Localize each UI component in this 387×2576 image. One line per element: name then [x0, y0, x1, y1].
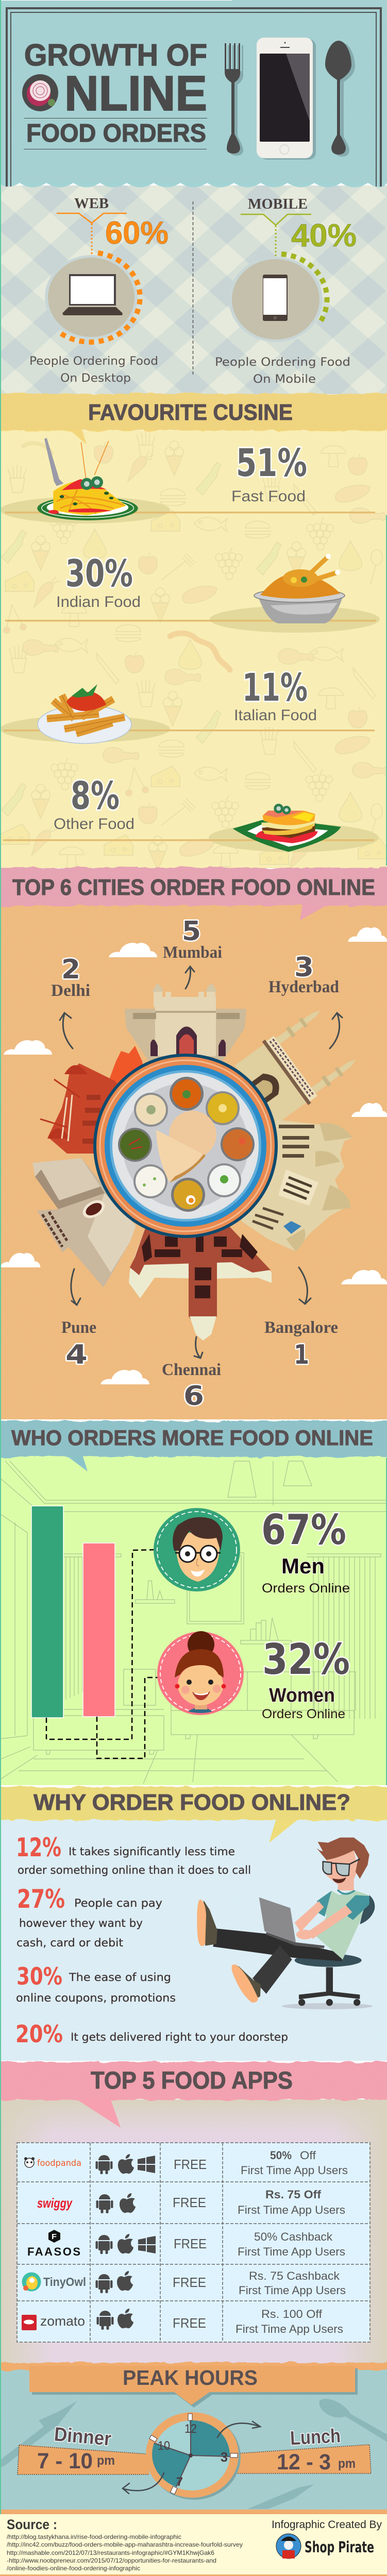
city: Delhi: 2	[61, 954, 80, 985]
row: foodpanda: 50%	[270, 2149, 292, 2162]
illustration: Bangalore palace	[241, 1120, 352, 1251]
text: web caption	[29, 355, 158, 385]
bowl: yellow curry	[206, 1091, 240, 1125]
reason: 27 percent: People can pay	[74, 1897, 162, 1909]
stat: italian food: Italian Food	[234, 707, 317, 724]
reason: 12 percent: 12%	[16, 1833, 61, 1862]
icon: phone	[257, 38, 316, 160]
illustration: Hyderabad charminar	[233, 1003, 361, 1126]
panel: top 5 apps band	[0, 2062, 387, 2128]
stat: italian food	[234, 666, 317, 724]
reason: 12 percent: order something online than it does to call	[18, 1864, 251, 1876]
icon: clock: 3	[221, 2449, 228, 2465]
row: zomato: FREE	[173, 2315, 206, 2331]
shelf shadows and lines	[0, 497, 380, 852]
arrows: meal times	[123, 2421, 260, 2494]
reason: 12 percent	[16, 1833, 251, 1876]
reason: 12 percent: It takes significantly less time	[69, 1845, 235, 1858]
connector: web	[57, 213, 127, 258]
row: faasos: First Time App Users	[238, 2245, 345, 2258]
reason: 30 percent: The ease of using	[69, 1971, 171, 1984]
illustration: Delhi red fort	[40, 1046, 144, 1154]
icon: spoon	[325, 41, 355, 157]
illustration: room line art	[0, 1461, 387, 1784]
heading: mobile: MOBILE	[248, 196, 308, 212]
illustration: Mumbai gateway	[125, 984, 246, 1062]
row: swiggy	[37, 2188, 345, 2216]
banner: peak hours: PEAK HOURS	[123, 2366, 258, 2389]
row: zomato	[22, 2308, 343, 2335]
panel: top 6 cities band	[0, 868, 387, 920]
row: foodpanda: Off	[300, 2149, 316, 2162]
row: tinyowl: First Time App Users	[239, 2284, 346, 2297]
row: faasos: FREE	[174, 2236, 207, 2251]
icon: penne pasta	[38, 684, 131, 743]
city: Mumbai	[163, 916, 222, 962]
reason: 27 percent: 27%	[17, 1884, 65, 1914]
stat: fast food: Fast Food	[231, 488, 306, 505]
text: sources: Source :	[7, 2517, 57, 2532]
heading: why order: WHY ORDER FOOD ONLINE?	[33, 1790, 350, 1815]
icon: man avatar	[154, 1508, 240, 1591]
icon: smartphone	[229, 254, 327, 342]
title: O	[22, 66, 59, 121]
stat: men	[261, 1506, 350, 1596]
label: dinner: Dinner	[53, 2424, 112, 2450]
row: swiggy: swiggy	[37, 2195, 73, 2211]
stat: other food	[54, 774, 134, 833]
text: mobile caption: People Ordering Food	[215, 356, 350, 369]
icon: shop pirate logo	[276, 2534, 301, 2558]
text: mobile caption: On Mobile	[253, 373, 316, 386]
reason: 27 percent	[16, 1884, 162, 1949]
illustration: thali plate	[93, 1054, 278, 1238]
city: Chennai: Chennai	[162, 1361, 221, 1379]
arrows: cities	[60, 967, 342, 1358]
stat: women	[262, 1635, 350, 1721]
heading: who orders: WHO ORDERS MORE FOOD ONLINE	[11, 1426, 373, 1450]
reason: 27 percent: cash, card or debit	[16, 1937, 123, 1949]
ribbon: lunch: 12 - 3	[277, 2450, 331, 2475]
icon: woman avatar	[157, 1631, 244, 1715]
text: web caption: On Desktop	[60, 372, 131, 385]
reason: 20 percent: 20%	[15, 2020, 63, 2048]
title	[22, 38, 207, 149]
icon: fork	[225, 43, 243, 156]
text: sources: /http://blog.tastykhana.in/rise-food-ordering-mobile-infographic	[7, 2533, 181, 2540]
row: swiggy: FREE	[173, 2195, 206, 2210]
stat: other food: Other Food	[54, 816, 134, 833]
heading: favourite cuisine: FAVOURITE CUSINE	[88, 400, 293, 425]
stat: men: Orders Online	[262, 1581, 350, 1596]
title: GROWTH OF	[24, 38, 207, 72]
mobile percentage: 40%	[291, 218, 357, 253]
food: roti	[156, 1111, 216, 1182]
row: foodpanda: First Time App Users	[241, 2164, 348, 2177]
reason: 30 percent	[16, 1962, 176, 2004]
city: Delhi: Delhi	[51, 981, 90, 1000]
row: faasos: FAASOS	[27, 2245, 80, 2258]
row: tinyowl: Rs. 75 Cashback	[249, 2269, 340, 2282]
illustration: man on chair with laptop	[197, 1838, 375, 2009]
row: faasos	[27, 2230, 345, 2258]
bowl: red curry	[170, 1077, 204, 1111]
row: faasos: F	[52, 2232, 57, 2241]
heading: top 5 apps: TOP 5 FOOD APPS	[91, 2066, 293, 2094]
icon: clock: 12	[184, 2422, 197, 2436]
clouds	[0, 927, 387, 1384]
text: sources: http://mashable.com/2012/07/13/restaurants-infographic/#GYM1KhwjGak6	[7, 2549, 214, 2556]
text: sources: -http://www.noobpreneur.com/2015/07/12/opportunities-for-restaurants-and	[7, 2557, 216, 2564]
row: swiggy: Rs. 75 Off	[265, 2188, 322, 2201]
city: Hyderabad: 3	[294, 952, 314, 983]
icon: biryani bowl	[254, 554, 345, 623]
reason: 30 percent: online coupons, promotions	[16, 1992, 176, 2004]
icon: clock: 10	[158, 2439, 170, 2453]
banner: peak hours	[29, 2366, 358, 2408]
reason: 20 percent: It gets delivered right to your doorstep	[71, 2031, 288, 2043]
bowl: orange curry	[221, 1127, 255, 1161]
illustration: Chennai building	[129, 1224, 272, 1341]
panel: why order band	[0, 1787, 387, 1843]
row: foodpanda: FREE	[174, 2157, 207, 2172]
stat: indian food: Indian Food	[56, 594, 141, 611]
divider	[193, 201, 194, 376]
stat: indian food	[56, 552, 141, 611]
city: Bangalore	[264, 1318, 338, 1370]
city: Chennai	[162, 1361, 221, 1412]
row: tinyowl	[22, 2269, 346, 2297]
reason: 30 percent: 30%	[16, 1962, 62, 1990]
table: food apps	[17, 2143, 370, 2342]
panel: header	[0, 0, 387, 188]
row: zomato: Rs. 100 Off	[261, 2308, 323, 2320]
row: swiggy: First Time App Users	[238, 2204, 345, 2216]
stat: indian food: 30%	[65, 552, 133, 595]
row: zomato: zomato	[40, 2313, 85, 2329]
stat: italian food: 11%	[242, 666, 308, 710]
illustration: Pune building	[32, 1158, 136, 1287]
row: foodpanda	[24, 2149, 348, 2177]
row: tinyowl: TinyOwl	[43, 2275, 86, 2289]
city: Pune	[61, 1318, 96, 1370]
text: credit: Infographic Created By	[272, 2519, 382, 2531]
bowl: egg curry	[171, 1178, 205, 1212]
ribbon: lunch: pm	[338, 2456, 356, 2471]
bowl: white raita	[133, 1164, 167, 1198]
city: Delhi	[51, 954, 90, 1000]
text: mobile caption	[215, 356, 350, 386]
city: Bangalore: 1	[294, 1340, 309, 1370]
title: FOOD ORDERS	[26, 120, 206, 147]
row: zomato: First Time App Users	[235, 2323, 343, 2335]
bar chart: men vs women	[31, 1506, 115, 1718]
text: sources: /http://inc42.com/buzz/food-orders-mobile-app-maharashtra-increase-fourfold-survey	[7, 2541, 243, 2548]
stat: other food: 8%	[71, 774, 120, 818]
icon: spaghetti	[37, 438, 138, 520]
row: tinyowl: FREE	[173, 2275, 206, 2290]
connector: mobile	[241, 214, 311, 259]
city: Hyderabad: Hyderbad	[268, 978, 339, 996]
panel: web share	[29, 195, 169, 385]
reason: 27 percent: however they want by	[19, 1917, 143, 1929]
heading: web: WEB	[74, 195, 109, 212]
text: web caption: People Ordering Food	[29, 355, 158, 368]
stat: men: Men	[281, 1554, 325, 1578]
icon: clock: 7	[176, 2475, 183, 2489]
row: foodpanda: foodpanda	[37, 2158, 81, 2168]
icon: laptop	[45, 253, 140, 342]
stat: fast food	[231, 441, 307, 505]
web percentage: 60%	[105, 215, 169, 251]
city: Bangalore: Bangalore	[264, 1318, 338, 1337]
city: Chennai: 6	[183, 1381, 204, 1412]
ghost cutlery	[0, 2399, 387, 2509]
city: Hyderabad	[268, 952, 339, 996]
bowl: raita green	[134, 1093, 168, 1127]
connectors	[46, 1550, 158, 1758]
city: Pune: Pune	[61, 1318, 96, 1337]
panel: favourite cuisine band	[0, 394, 387, 445]
ribbon: lunch	[233, 2445, 371, 2475]
icon: onion	[22, 74, 58, 111]
text: sources: /online-foodies-online-food-ordering-infographic	[7, 2565, 140, 2572]
title: NLINE	[64, 66, 207, 121]
text: sources	[7, 2517, 243, 2572]
panel: peak hours	[0, 2363, 387, 2514]
city: Mumbai: Mumbai	[163, 943, 222, 962]
panel: mobile share	[215, 196, 357, 386]
stat: women: Women	[269, 1685, 335, 1706]
panel: who orders band	[0, 1421, 387, 1471]
ribbon: dinner	[18, 2445, 149, 2475]
ribbon: dinner: pm	[97, 2453, 115, 2468]
icon: lasagna	[233, 804, 341, 852]
row: faasos: 50% Cashback	[254, 2230, 333, 2243]
bowl: green curry	[118, 1128, 152, 1162]
stat: fast food: 51%	[236, 441, 307, 485]
reason: 20 percent	[15, 2020, 288, 2048]
panel: footer	[0, 2514, 387, 2576]
ribbon: dinner: 7 - 10	[37, 2449, 93, 2473]
labels: cities and rankings	[51, 916, 339, 1412]
city: Mumbai: 5	[182, 916, 201, 947]
bowl: rice	[207, 1163, 241, 1197]
stat: women: 32%	[262, 1635, 350, 1684]
city: Pune: 4	[65, 1340, 88, 1370]
icon: clock	[146, 2412, 241, 2500]
stat: men: 67%	[261, 1506, 346, 1554]
label: lunch: Lunch	[290, 2425, 341, 2449]
stat: women: Orders Online	[262, 1707, 345, 1721]
food doodle pattern	[1, 432, 387, 871]
